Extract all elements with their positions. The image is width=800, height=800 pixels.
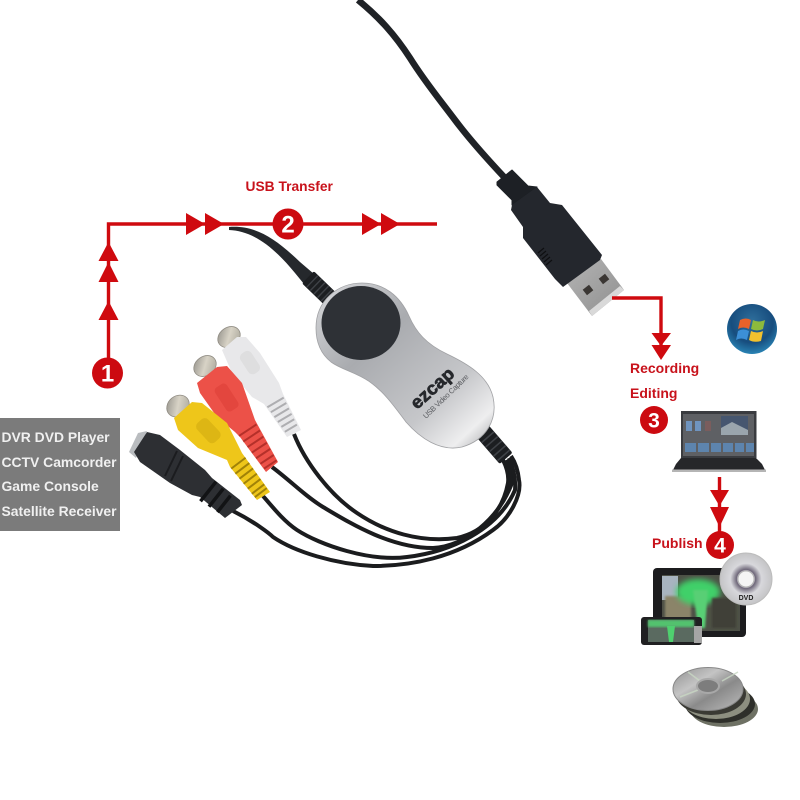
laptop with editing software: [672, 411, 766, 472]
USB Video Capture label: USB Video Capture: [421, 372, 471, 420]
CD stack: [673, 668, 758, 727]
USB cable to the computer: [358, 0, 505, 178]
upper strain relief: [302, 271, 340, 308]
step 4 badge: [706, 531, 734, 559]
source device list: Game Console: [2, 478, 99, 494]
step 4 badge: 4: [714, 534, 726, 558]
USB plug: [497, 170, 624, 316]
USB Transfer heading: USB Transfer: [246, 179, 334, 194]
red flow line: steps 1 to 2: [92, 208, 437, 388]
arrowheads pointing up: [98, 242, 118, 320]
step 2 badge: [272, 208, 304, 240]
red RCA connector: [190, 351, 279, 472]
Windows logo: [727, 304, 777, 354]
DVD disc: [720, 553, 772, 605]
step 3 badge: 3: [648, 410, 660, 432]
ezcap logo: ezcap: [406, 363, 458, 413]
timeline thumbnails: [685, 443, 754, 452]
lower strain relief: [472, 420, 513, 464]
s-video cable: [233, 456, 519, 566]
flow line: [108, 224, 437, 358]
red cable: [272, 460, 512, 548]
USB grille: [538, 248, 552, 265]
laptop base: [672, 458, 766, 472]
yellow cable: [263, 458, 515, 558]
source device list: DVR DVD Player: [2, 429, 110, 445]
step 1 badge: [92, 358, 123, 388]
USB strain relief: [497, 170, 537, 205]
arrowheads pointing right: [186, 213, 400, 235]
Recording label: Recording: [630, 360, 699, 376]
device body: [316, 283, 494, 448]
step 1 badge: 1: [101, 360, 114, 388]
red arrow: laptop to publish: [710, 477, 729, 534]
ezcap capture device: [316, 283, 494, 448]
source device list: Satellite Receiver: [2, 503, 117, 519]
laptop screen: [681, 411, 756, 458]
Editing label: Editing: [630, 385, 677, 401]
cable bundle: [233, 434, 519, 566]
capture cable up to USB transfer line: [229, 227, 314, 284]
source device list: CCTV Camcorder: [2, 454, 117, 470]
source devices panel: [0, 418, 120, 531]
white RCA connector: [214, 322, 301, 437]
white cable: [294, 434, 508, 539]
yellow RCA connector: [162, 391, 270, 500]
device dark button: [322, 286, 400, 360]
USB metal shell: [567, 259, 624, 316]
USB moulded housing: [511, 187, 602, 287]
S-video connector: [129, 431, 242, 518]
step 3 badge: [640, 406, 668, 434]
step 2 badge: 2: [281, 212, 295, 238]
Publish label: Publish: [652, 535, 703, 551]
smartphone: [641, 617, 702, 645]
red arrow: USB to recording: [612, 298, 671, 360]
source device list: [2, 429, 117, 519]
DVD mark: DVD: [739, 595, 753, 602]
tablet: [653, 568, 746, 637]
